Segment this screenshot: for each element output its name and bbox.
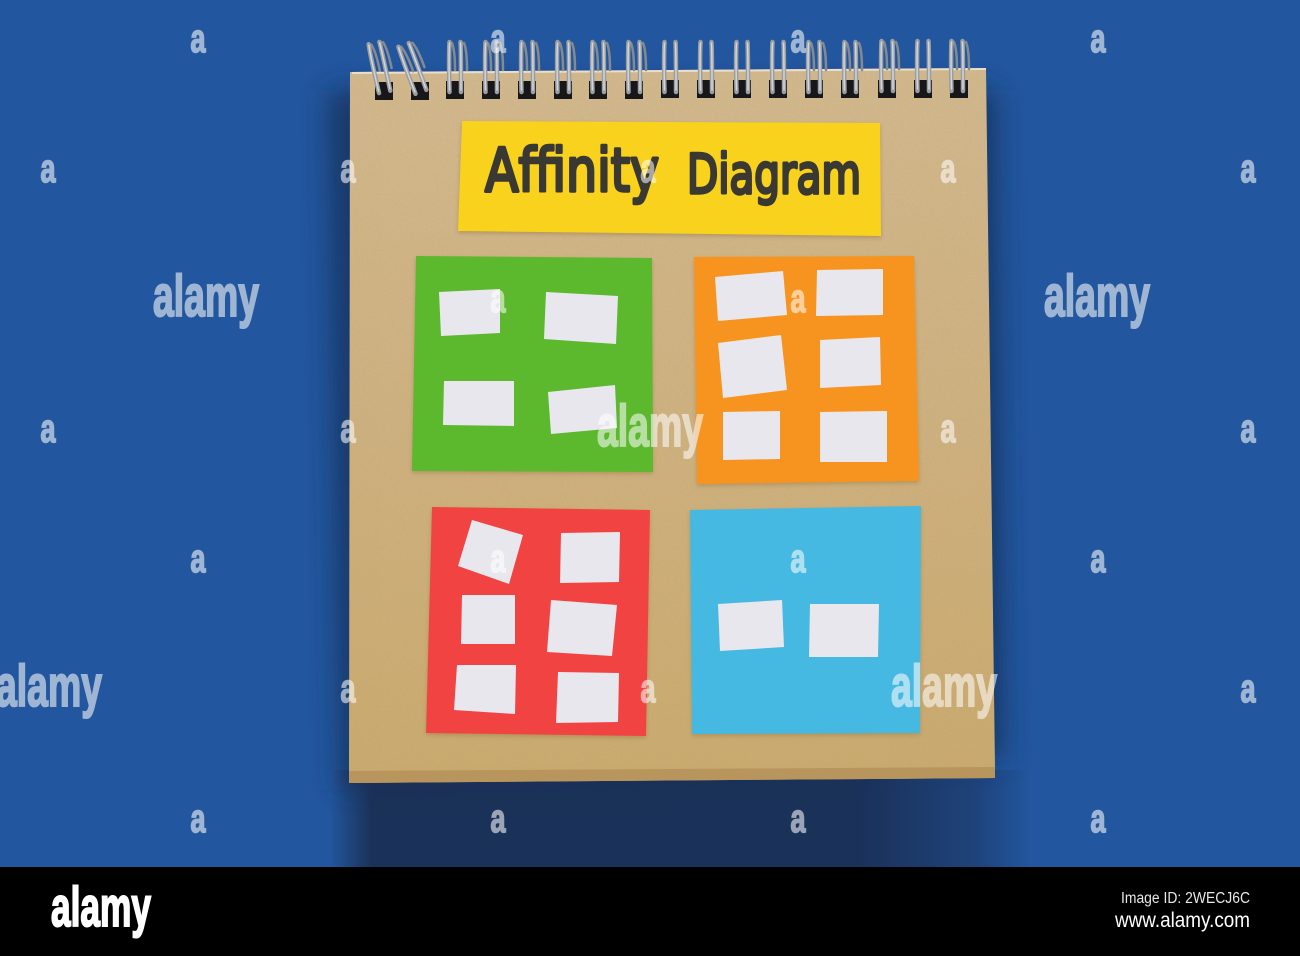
watermark: large logos: alamy [0,654,102,719]
footer bar [0,867,1300,956]
watermark: large logos: alamy [153,264,259,329]
title text: Affinity [485,136,659,206]
watermark: large logos: alamy [1044,264,1150,329]
title note: yellow [458,121,881,238]
watermark: large logos: alamy [597,394,703,459]
image id: Image ID: 2WECJ6C [1121,890,1250,907]
spiral binding [368,41,969,100]
panel: green cluster [412,256,653,474]
panel: blue cluster [690,506,921,736]
footer logo: alamy [51,875,151,938]
title text [485,136,861,206]
notebook shadow [328,90,1030,867]
title text: Diagram [687,143,861,206]
panel: orange cluster [694,256,919,486]
watermark: large logos: alamy [891,654,997,719]
watermark: large logos [0,264,1150,719]
notebook [349,41,996,784]
notebook cover [349,68,995,783]
panel: red cluster [426,507,650,738]
website: www.alamy.com [1114,909,1250,932]
